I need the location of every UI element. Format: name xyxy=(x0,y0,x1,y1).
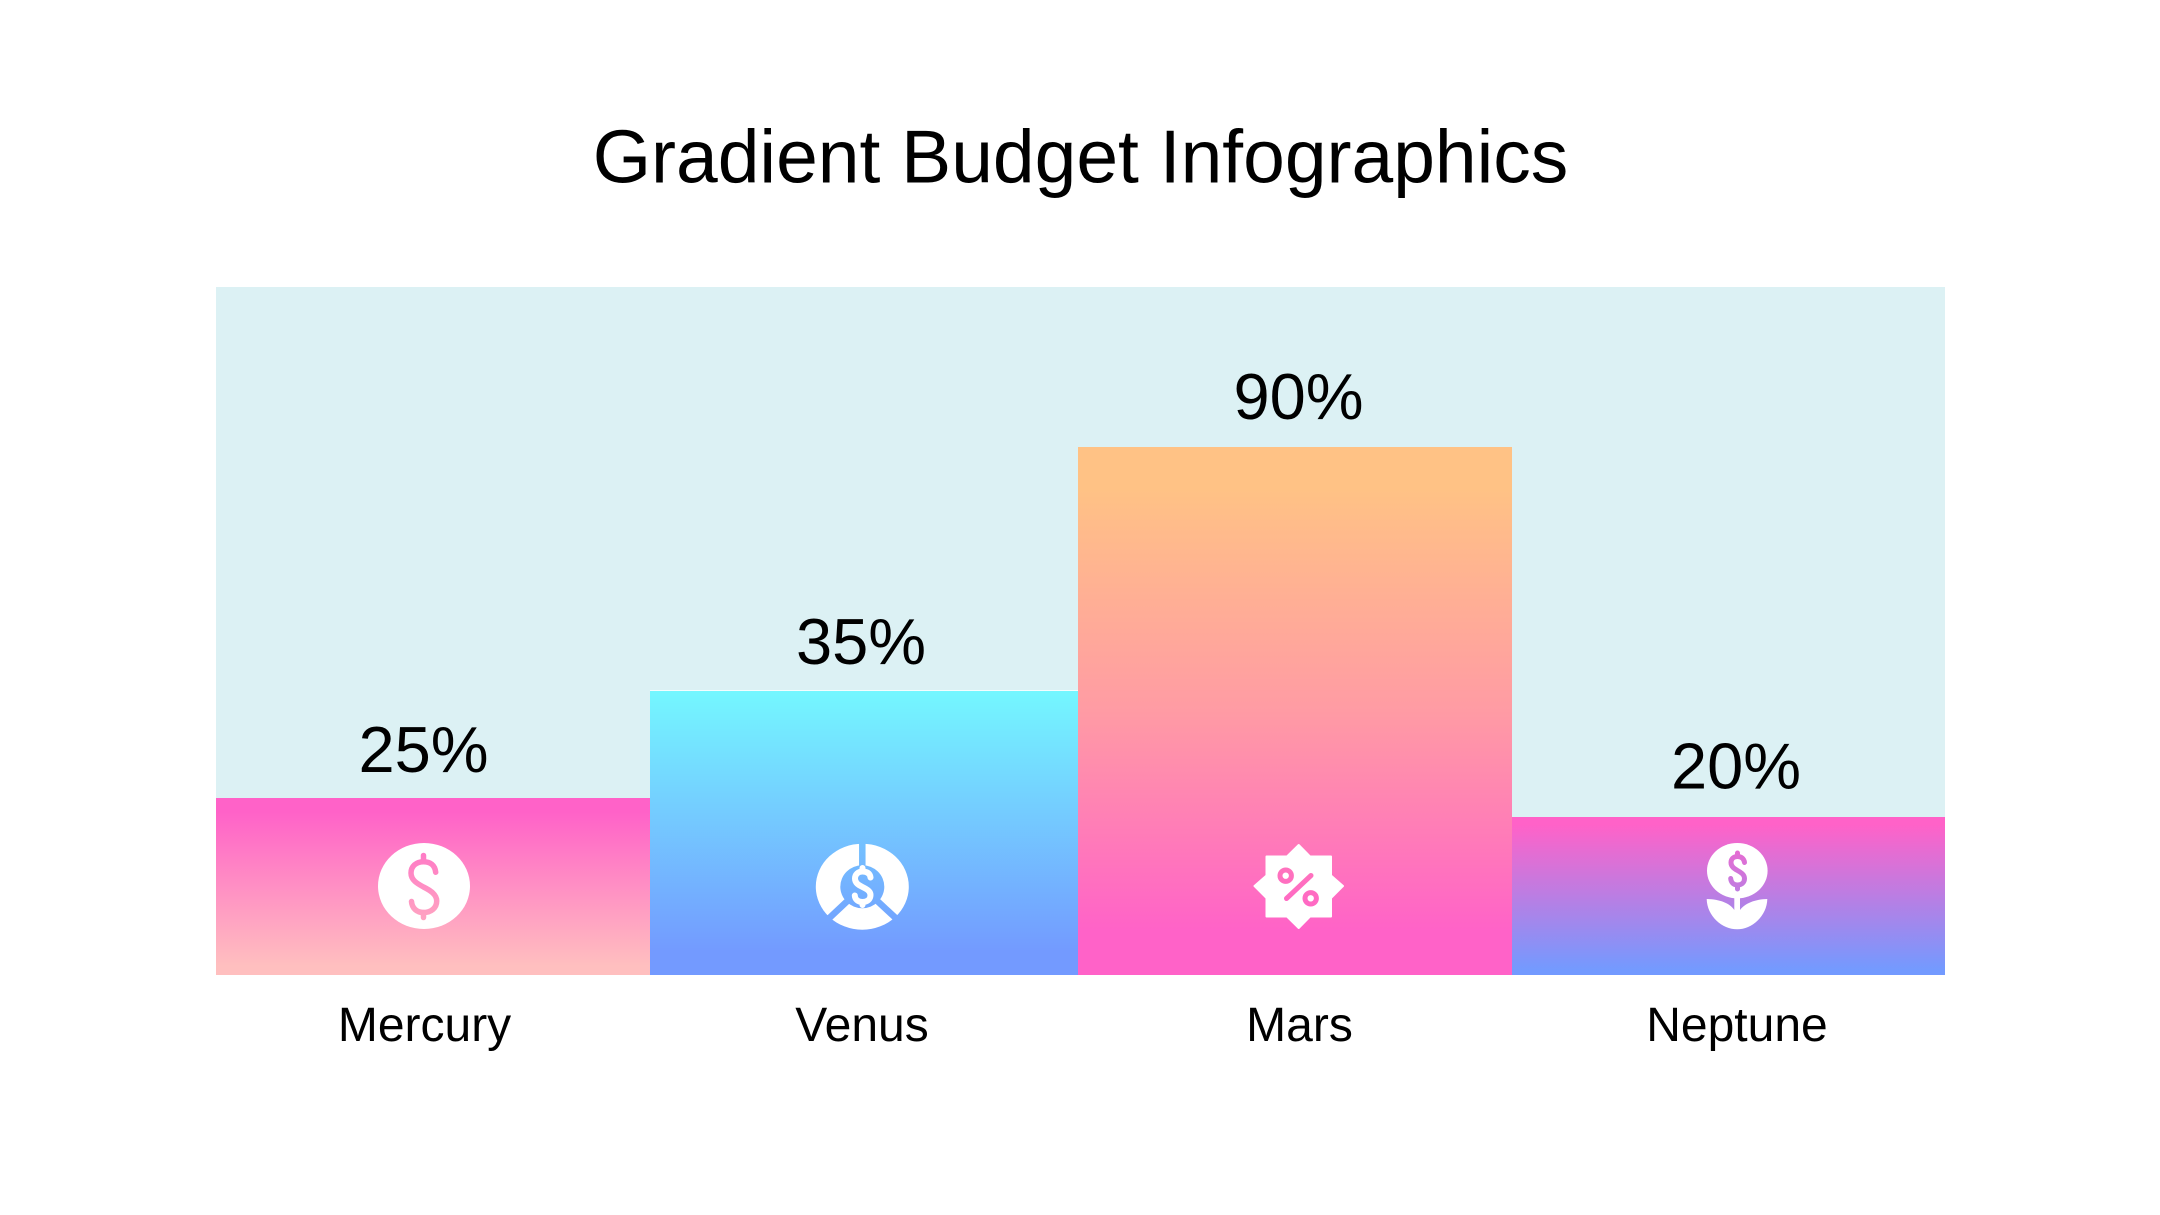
bar: Neptune 20% xyxy=(1512,817,1945,975)
value: Mars 90%: 90% xyxy=(1233,360,1364,433)
label: Mercury: Mercury xyxy=(338,999,511,1052)
value: Neptune 20%: 20% xyxy=(1671,730,1801,802)
title: Gradient Budget Infographics xyxy=(593,114,1568,198)
panel: chart background xyxy=(216,287,1945,975)
icon: Venus dollar donut xyxy=(816,838,909,930)
icon: Neptune money plant xyxy=(1707,843,1768,929)
icon: Mercury dollar coin xyxy=(378,843,470,929)
bar: Mercury 25% xyxy=(216,798,650,975)
bar: Mars 90% xyxy=(1078,447,1512,975)
value: Venus 35%: 35% xyxy=(796,605,926,678)
bar: Venus 35% xyxy=(650,691,1078,975)
label: Venus: Venus xyxy=(795,999,929,1052)
label: Neptune: Neptune xyxy=(1646,999,1828,1052)
label: Mars: Mars xyxy=(1246,999,1353,1052)
icon: Mars percent badge xyxy=(1254,845,1343,928)
value: Mercury 25%: 25% xyxy=(358,713,489,786)
